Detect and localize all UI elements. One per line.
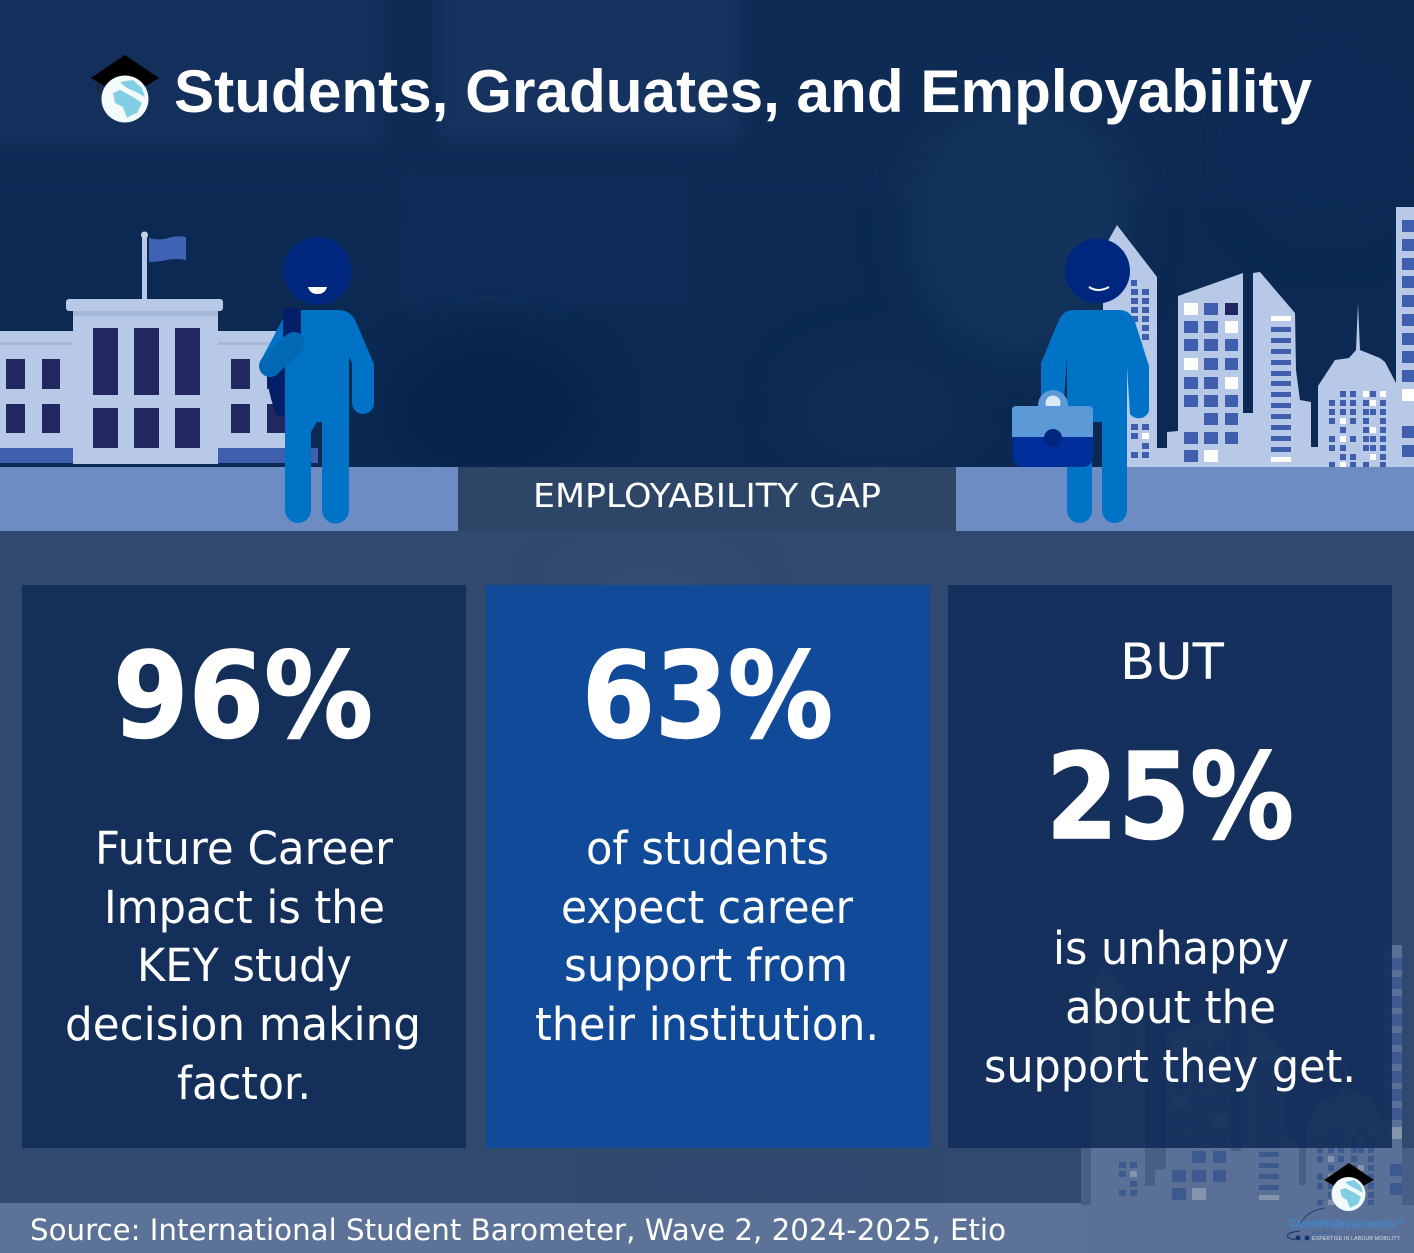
panel: 96%: Future Career: [95, 822, 393, 875]
footer logo: powered by: [1312, 1230, 1336, 1235]
panel: but 25%: about the: [1065, 981, 1276, 1034]
panel: 63%: support from: [564, 939, 848, 992]
panel: 96%: Impact is the: [104, 881, 385, 934]
gap band: [458, 467, 956, 531]
panel: 63%: [486, 585, 930, 1148]
ground platform right: [956, 467, 1414, 531]
panel: 96%: factor.: [177, 1057, 311, 1110]
panel: 63%: expect career: [561, 881, 853, 934]
source text: Source: International Student Barometer, Wave 2, 2024-2025, Etio: [30, 1213, 1006, 1247]
panel: 96%: KEY study: [137, 939, 352, 992]
illustration: city skyline: [1103, 207, 1414, 467]
panel: but 25%: 25%: [1046, 729, 1294, 867]
illustration: university building: [0, 232, 318, 464]
panel: but 25%: is unhappy: [1053, 922, 1289, 975]
title: Students, Graduates, and Employability: [174, 58, 1313, 125]
footer logo: EXPERTISE IN LABOUR MOBILITY: [1312, 1236, 1401, 1242]
panel: but 25%: BUT: [1120, 633, 1224, 691]
title logo: globe with graduation cap: [91, 55, 159, 122]
panel: 63%: 63%: [582, 628, 833, 766]
background ghost city: [1081, 945, 1414, 1253]
panel: but 25%: support they get.: [984, 1040, 1356, 1093]
figure: student with backpack: [260, 237, 374, 524]
panel: 96%: decision making: [65, 998, 421, 1051]
footer logo: [1287, 1163, 1405, 1242]
source strip: [0, 1203, 1081, 1253]
panel: 63%: their institution.: [535, 998, 879, 1051]
ground platform left: [0, 467, 458, 531]
panel: 96%: 96%: [113, 628, 373, 766]
panel: but 25%: [948, 585, 1392, 1148]
panel: 96%: [22, 585, 466, 1148]
panel: 63%: of students: [586, 822, 829, 875]
gap label: EMPLOYABILITY GAP: [533, 476, 881, 515]
figure: graduate with briefcase: [1012, 238, 1149, 523]
